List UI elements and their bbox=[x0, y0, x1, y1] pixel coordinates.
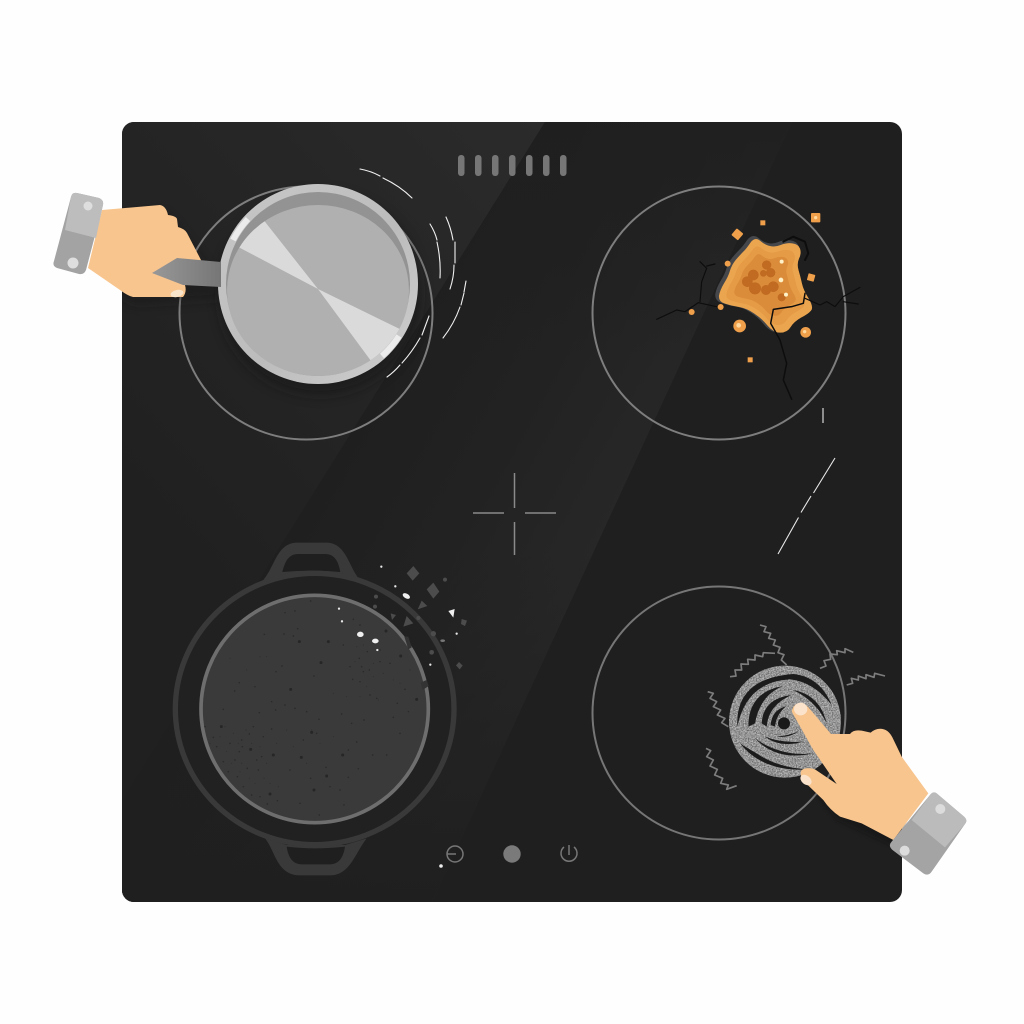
pan inner wall bbox=[226, 192, 410, 376]
bottom handle bbox=[265, 838, 367, 875]
right cuff bbox=[890, 792, 966, 875]
spill outer bbox=[719, 239, 812, 333]
rim glints bbox=[233, 219, 399, 356]
scratch marks bbox=[778, 408, 835, 554]
power icon bbox=[561, 845, 577, 861]
debris highlights bbox=[736, 216, 817, 333]
left cuff bbox=[53, 193, 103, 274]
burner ring: bottom right bbox=[592, 586, 846, 840]
bottom handle opening bbox=[287, 847, 345, 864]
spill inner layer bbox=[734, 254, 796, 316]
bright flakes bbox=[357, 592, 455, 643]
light reflection wedges bbox=[240, 222, 400, 360]
burnt food spill with cracks bbox=[657, 213, 860, 399]
bright chips on pot bbox=[339, 567, 457, 665]
illustration: induction cooktop bbox=[54, 122, 966, 902]
spill char bbox=[742, 260, 786, 301]
pot base bbox=[201, 595, 428, 823]
pot outer wall bbox=[175, 573, 454, 845]
swirl centre hole bbox=[778, 717, 790, 729]
centre cross mark bbox=[473, 473, 556, 555]
pan rim bbox=[218, 184, 418, 384]
thumbnail bbox=[170, 289, 184, 298]
pan handle bbox=[152, 258, 221, 287]
dark flakes bbox=[373, 566, 467, 690]
top handle opening bbox=[282, 554, 340, 572]
top handle bbox=[263, 543, 360, 580]
control panel icons bbox=[439, 845, 577, 868]
cracks bbox=[657, 237, 860, 399]
swirl scratch disc bbox=[729, 666, 841, 778]
index fingernail bbox=[794, 703, 807, 715]
pan base bbox=[227, 205, 409, 376]
burner ring: top left bbox=[180, 186, 432, 440]
vibration squiggles bbox=[706, 625, 885, 789]
spill halo bbox=[717, 237, 810, 331]
burner ring: top right bbox=[592, 186, 846, 440]
spill highlights bbox=[779, 260, 788, 297]
spill mid layer bbox=[726, 246, 805, 325]
steel pan with hand bbox=[53, 184, 421, 395]
swirl dark gaps bbox=[737, 674, 832, 770]
timer icon bbox=[447, 846, 463, 862]
small white dot bbox=[439, 864, 443, 868]
pointing hand bbox=[792, 703, 928, 840]
hand shadow bbox=[179, 246, 198, 307]
motion lines around pan bbox=[360, 169, 466, 377]
cast iron pot bbox=[175, 543, 467, 875]
food debris bbox=[689, 213, 820, 362]
left hand bbox=[88, 205, 201, 297]
burnt speckles bbox=[221, 631, 424, 794]
cooktop panel bbox=[122, 122, 902, 902]
vent slots bbox=[458, 155, 566, 176]
scorched swirl scratches with pointing hand bbox=[706, 625, 966, 875]
thumbnail bbox=[798, 773, 814, 787]
hand shadow bbox=[803, 777, 910, 847]
centre button bbox=[503, 845, 521, 863]
pan shadow bbox=[219, 193, 421, 395]
